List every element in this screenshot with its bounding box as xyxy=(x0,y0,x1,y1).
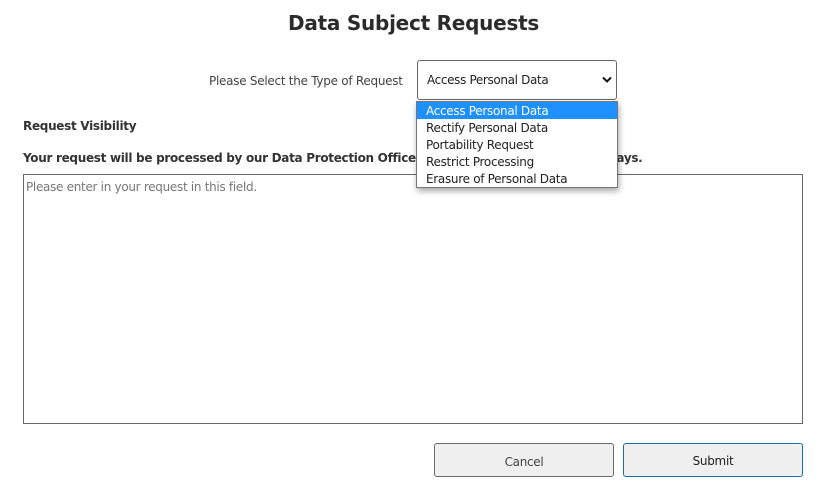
visibility heading: Request Visibility xyxy=(23,119,136,133)
select control xyxy=(417,60,617,100)
option restrict: Restrict Processing xyxy=(426,155,534,169)
option portability: Portability Request xyxy=(426,138,533,152)
selected value: Access Personal Data xyxy=(427,73,548,87)
placeholder: Please enter in your request in this field. xyxy=(26,180,257,194)
select label: Please Select the Type of Request xyxy=(209,74,403,88)
submit button: Submit xyxy=(693,454,733,468)
icon: chevron xyxy=(602,76,612,83)
option rectify: Rectify Personal Data xyxy=(426,121,548,135)
option selected: Access Personal Data xyxy=(426,104,548,118)
request text area xyxy=(23,174,803,424)
dropdown list xyxy=(416,101,618,188)
title: Data Subject Requests xyxy=(288,11,539,35)
option selected xyxy=(417,102,617,119)
processing notice: Your request will be processed by our Data Protection Officer and responded to within 30 days. xyxy=(23,151,642,165)
cancel button xyxy=(434,443,614,477)
cancel button: Cancel xyxy=(505,455,543,469)
option erasure: Erasure of Personal Data xyxy=(426,172,567,186)
submit button xyxy=(623,443,803,477)
